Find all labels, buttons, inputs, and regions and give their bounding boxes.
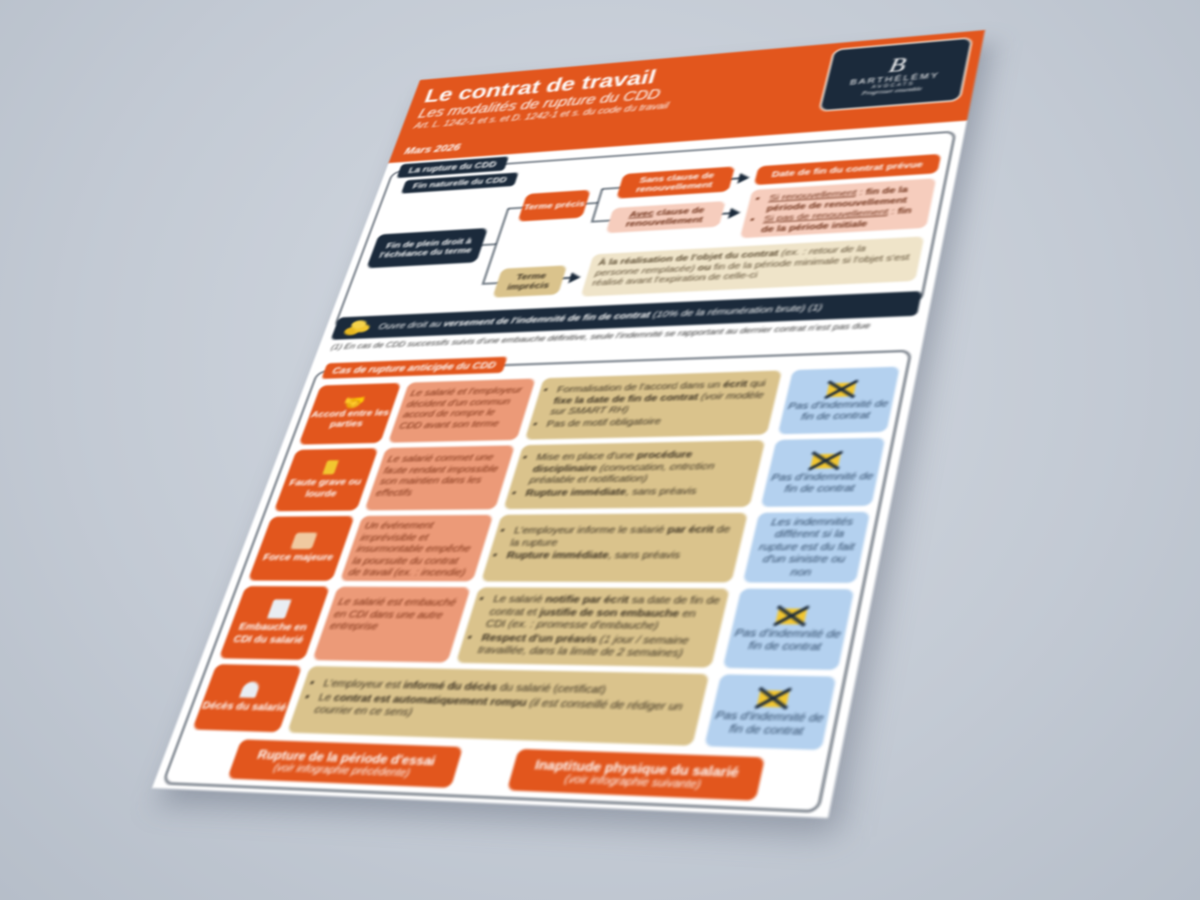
box: sans clause [616, 166, 735, 199]
tab: fin naturelle [401, 172, 519, 194]
row: force majeure: Les indemnités diffèrent si la rupture est du fait d'un sinistre ou non [758, 516, 856, 578]
tab: cas de rupture anticipée: Cas de rupture anticipée du CDD [331, 360, 498, 376]
logo: B [887, 53, 908, 76]
button: période d'essai: Rupture de la période d'essai [256, 747, 437, 768]
row: accord entre les parties: Pas de motif obligatoire [545, 416, 662, 429]
button: période d'essai [227, 739, 463, 788]
row: force majeure: Un événement imprévisible et insurmontable empêche la poursuite du contrat de travail (ex. : incendie) [347, 520, 472, 578]
box: terme imprécis [492, 265, 567, 298]
legal reference: Art. L. 1242-1 et s. et D. 1242-1 et s. du code du travail [413, 102, 670, 131]
box: fin de plein droit: Fin de plein droit à l'échéance du terme [378, 236, 473, 260]
logo [818, 37, 973, 112]
footnote: (1) En cas de CDD successifs suivis d'une embauche définitive, seule l'indemnité se rapportant au dernier contrat n'est pas due [330, 321, 871, 352]
row: faute grave: Le salarié commet une faute rendant impossible son maintien dans les effectifs [375, 452, 500, 498]
icon: coins [342, 319, 371, 336]
box: avec clause: Avec clause de renouvellement [624, 205, 706, 229]
button: inaptitude [507, 749, 765, 801]
row: décès du salarié: Pas d'indemnité de fin de contrat [714, 708, 825, 738]
box: date de fin prévue: Date de fin du contrat prévue [771, 160, 924, 179]
box: fin de plein droit [366, 228, 488, 268]
button: inaptitude: (voir infographie suivante) [563, 773, 702, 791]
row: accord entre les parties: Accord entre les parties [310, 407, 391, 430]
row: embauche en CDI: Le salarié notifie par écrit sa date de fin de contrat et justifie de son embauche en CDI (ex. : promesse d'embauche) [484, 593, 721, 632]
tab: fin naturelle: Fin naturelle du CDD [411, 175, 508, 191]
row: force majeure [248, 510, 870, 584]
tab: cas de rupture anticipée [321, 357, 507, 379]
logo: AVOCATS [871, 81, 915, 89]
row: décès du salarié: Décès du salarié [200, 700, 288, 714]
row: force majeure: Rupture immédiate, sans préavis [505, 549, 682, 561]
tab: la rupture du CDD [397, 156, 509, 178]
header banner [389, 30, 985, 163]
box: terme précis [518, 190, 591, 222]
row: force majeure: L'employeur informe le salarié par écrit de la rupture [509, 524, 731, 548]
box: renouvellement bullets: Si pas de renouvellement : fin de la période initiale [760, 206, 913, 234]
row: faute grave: Pas d'indemnité de fin de contrat [770, 470, 875, 495]
box: objet du contrat: À la réalisation de l'objet du contrat (ex. : retour de la personne remplacée) ou fin de la période minimale si l'objet s'est réalisé avant l'expiration de celle-ci [591, 244, 911, 288]
row: embauche en CDI: Embauche en CDI du salarié [232, 621, 309, 646]
row: faute grave: Faute grave ou lourde [288, 476, 363, 499]
connectors [480, 172, 751, 286]
bar: indemnité de fin de contrat: Ouvre droit au versement de l'indemnité de fin de contrat (10% de la rémunération brute) (1) [377, 302, 824, 331]
button: période d'essai: (voir infographie précédente) [272, 762, 411, 779]
bar: indemnité de fin de contrat [331, 291, 922, 340]
box: sans clause: Sans clause de renouvellement [635, 170, 715, 194]
panel: rupture du CDD [333, 131, 957, 329]
row: décès du salarié: Le contrat est automatiquement rompu (il est conseillé de rédiger un courrier en ce sens) [313, 691, 684, 719]
button: inaptitude: Inaptitude physique du salarié [533, 757, 741, 780]
row: accord entre les parties: Formalisation de l'accord dans un écrit qui fixe la date de fin de contrat (voir modèle sur SMART RH) [549, 378, 767, 417]
row: force majeure: Force majeure [261, 552, 335, 563]
row: embauche en CDI: Le salarié est embauché en CDI dans une autre entreprise [328, 596, 458, 632]
box: terme imprécis: Terme imprécis [506, 271, 551, 292]
row: accord entre les parties: Pas d'indemnité de fin de contrat [787, 398, 890, 423]
row: accord entre les parties: Le salarié et l'employeur décident d'un commun accord de rompre le CDD avant son terme [398, 385, 523, 431]
row: accord entre les parties [298, 366, 900, 446]
row: faute grave [274, 436, 886, 513]
box: avec clause [606, 201, 726, 233]
row: embauche en CDI: Pas d'indemnité de fin de contrat [734, 626, 842, 653]
row: faute grave: Rupture immédiate, sans préavis [524, 485, 698, 498]
tab: la rupture du CDD: La rupture du CDD [407, 160, 498, 175]
row: embauche en CDI [218, 584, 854, 672]
row: embauche en CDI: Respect d'un préavis (1 jour / semaine travaillée, dans la limite de 2 semaines) [476, 631, 690, 660]
logo: Progresser ensemble [861, 85, 923, 96]
row: faute grave: Mise en place d'une procédure disciplinaire (convocation, entretien préalable et notification) [528, 449, 716, 486]
box: date de fin prévue [754, 154, 941, 185]
box: terme précis: Terme précis [522, 199, 586, 212]
box: objet du contrat [581, 236, 924, 297]
row: décès du salarié [192, 662, 837, 752]
title: Le contrat de travail [422, 66, 659, 107]
page: infographic sheet [152, 30, 985, 818]
row: accord entre les parties: 🤝 [340, 394, 368, 412]
row: décès du salarié: L'employeur est informé du décès du salarié (certificat) [322, 677, 607, 696]
box: renouvellement bullets: Si renouvellement : fin de la période de renouvellement [766, 185, 909, 213]
panel: rupture anticipée [162, 350, 912, 813]
date: Mars 2026 [403, 141, 462, 156]
logo: BARTHÉLÉMY [849, 71, 941, 87]
box: renouvellement bullets [740, 178, 936, 238]
subtitle: Les modalités de rupture du CDD [416, 87, 662, 121]
